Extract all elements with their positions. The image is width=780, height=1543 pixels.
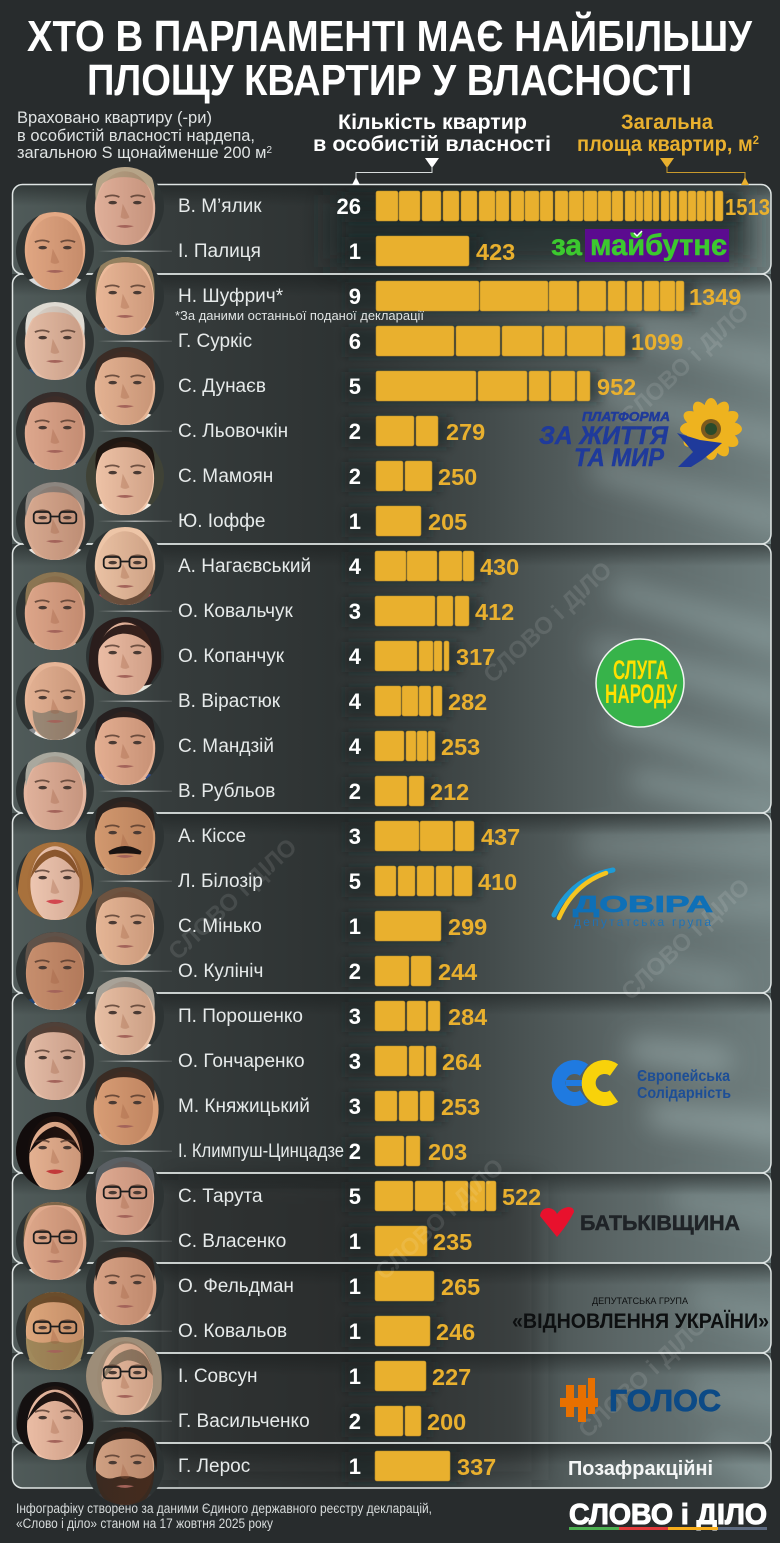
portrait: О. Фельдман (86, 1247, 164, 1325)
bar: 2 apartments (375, 956, 431, 986)
row: Г. Васильченко: Г. Васильченко (178, 1411, 310, 1432)
panel: Відновлення України (12, 1263, 771, 1353)
portrait: Г. Васильченко (16, 1378, 94, 1465)
row: Г. Васильченко: 2 (349, 1409, 361, 1434)
row: Н. Шуфрич: Н. Шуфрич* (178, 286, 284, 307)
row: Г. Лерос: 1 (349, 1454, 361, 1479)
row: О. Ковальчук: 412 (475, 599, 514, 625)
icon: sunflower (680, 398, 742, 460)
row: В. М'ялик: В. М’ялик (178, 196, 262, 217)
watermarks: СЛОВО і ДІЛО (616, 873, 755, 1006)
watermarks: СЛОВО і ДІЛО (478, 556, 617, 689)
portrait: В. Вірастюк (16, 662, 94, 740)
row: Ю. Іоффе (178, 506, 467, 536)
row: І. Климпуш-Цинцадзе: 203 (428, 1139, 467, 1165)
portrait: В. М'ялик (86, 167, 164, 245)
row: О. Кулініч: О. Кулініч (178, 961, 263, 982)
row: І. Климпуш-Цинцадзе (178, 1136, 467, 1166)
logo: Платформа за життя та мир: ЗА ЖИТТЯ (539, 422, 669, 450)
bar: 4 apartments (375, 731, 435, 761)
row: С. Тарута: С. Тарута (178, 1186, 263, 1207)
portrait: О. Копанчук (86, 613, 164, 700)
methodology note (17, 109, 272, 162)
bar: 3 apartments (375, 1046, 436, 1076)
column header: total area: площа квартир, м (577, 132, 766, 156)
bar: 1 apartment (375, 1271, 434, 1301)
row: М. Княжицький (178, 1091, 480, 1121)
icon: origami bird (677, 433, 722, 467)
row: О. Гончаренко: 3 (349, 1049, 361, 1074)
logo: Голос (560, 1378, 721, 1422)
row: І. Совсун: І. Совсун (178, 1366, 258, 1387)
portrait: С. Льовочкін (16, 392, 94, 470)
row: Г. Лерос: 337 (457, 1454, 496, 1480)
row: І. Совсун (178, 1361, 471, 1391)
logo: Слуга народу (596, 639, 684, 727)
row: О. Ковальчук (178, 596, 514, 626)
column header: total area (577, 110, 759, 185)
bar: 26 apartments (376, 191, 723, 221)
column header: apartment count: в особистій власності (313, 132, 551, 156)
logo: Платформа за життя та мир: ТА МИР (574, 444, 664, 472)
portrait: А. Кіссе (86, 797, 164, 875)
row: Г. Васильченко (178, 1406, 466, 1436)
footer source note: «Слово і діло» станом на 17 жовтня 2025 року (16, 1516, 273, 1531)
bar: 5 apartments (376, 371, 590, 401)
portrait: Ю. Іоффе (16, 482, 94, 560)
row: І. Палиця: І. Палиця (178, 241, 261, 262)
logo: Батьківщина (540, 1207, 740, 1237)
logo: Відновлення України: «ВІДНОВЛЕННЯ УКРАЇНИ» (512, 1310, 769, 1333)
row: П. Порошенко: П. Порошенко (178, 1006, 303, 1027)
row: В. Рубльов: 2 (349, 779, 361, 804)
logo: Європейська Солідарність (559, 1067, 731, 1102)
row: С. Мінько: С. Мінько (178, 916, 262, 937)
row: О. Ковальов: 246 (436, 1319, 475, 1345)
row: М. Княжицький: 3 (349, 1094, 361, 1119)
title: ПЛОЩУ КВАРТИР У ВЛАСНОСТІ (87, 56, 692, 105)
logo: Платформа за життя та мир (539, 398, 742, 472)
row: В. Рубльов (178, 776, 469, 806)
portrait: О. Гончаренко (16, 1018, 94, 1105)
column header: total area: Загальна (621, 110, 714, 134)
row: В. Рубльов: 212 (430, 779, 469, 805)
row: С. Льовочкін: 279 (446, 419, 485, 445)
row: С. Власенко (178, 1226, 472, 1256)
logo: Відновлення України: ДЕПУТАТСЬКА ГРУПА (592, 1296, 689, 1307)
row: С. Мінько (178, 911, 487, 941)
portrait: С. Мамоян (86, 437, 164, 515)
column header: apartment count: Кількість квартир (338, 110, 527, 134)
row: С. Мінько: 1 (349, 914, 361, 939)
row: О. Копанчук (178, 641, 495, 671)
row: О. Ковальчук: 3 (349, 599, 361, 624)
row: О. Ковальчук: О. Ковальчук (178, 601, 294, 622)
portrait: С. Тарута (86, 1157, 164, 1235)
row: А. Кіссе (178, 821, 520, 851)
row: О. Копанчук: О. Копанчук (178, 646, 285, 667)
logo: Слуга народу: СЛУГА (613, 655, 668, 685)
panel: Слуга народу (12, 544, 771, 813)
bar: 1 apartment (376, 236, 469, 266)
row: Ю. Іоффе: 1 (349, 509, 361, 534)
row: С. Мамоян: 250 (438, 464, 477, 490)
row: С. Тарута: 522 (502, 1184, 541, 1210)
row: Г. Васильченко: 200 (427, 1409, 466, 1435)
logo: Європейська Солідарність: Солідарність (637, 1085, 731, 1102)
row: В. Рубльов: В. Рубльов (178, 781, 275, 802)
row: В. М'ялик (178, 191, 770, 221)
row: А. Нагаєвський: 430 (480, 554, 519, 580)
methodology note: загальною S щонайменше 200 м (17, 144, 268, 162)
panel: Європейська Солідарність (12, 993, 771, 1173)
row: Ю. Іоффе: 205 (428, 509, 467, 535)
portrait: Н. Шуфрич (86, 257, 164, 335)
footnote: *За даними останньої поданої декларації (175, 308, 424, 323)
portrait: Г. Лерос (86, 1427, 164, 1505)
bar: 4 apartments (375, 686, 442, 716)
row: А. Кіссе: 3 (349, 824, 361, 849)
portrait: І. Совсун (86, 1337, 164, 1415)
bar: 1 apartment (375, 1451, 450, 1481)
methodology note: в особистій власності нардепа, (17, 127, 255, 145)
portrait: Г. Суркіс (16, 302, 94, 380)
row: О. Фельдман (178, 1271, 480, 1301)
row: П. Порошенко: 284 (448, 1004, 487, 1030)
row: Г. Суркіс: 1099 (631, 329, 683, 355)
row: А. Кіссе: А. Кіссе (178, 826, 246, 847)
bar: 2 apartments (376, 461, 432, 491)
methodology note: 2 (266, 145, 272, 156)
row: В. Вірастюк (178, 686, 487, 716)
row: Г. Суркіс: Г. Суркіс (178, 331, 252, 352)
watermarks (163, 298, 755, 1444)
portrait: О. Ковальов (16, 1292, 94, 1370)
row: Л. Білозір: Л. Білозір (178, 871, 263, 892)
bar: 3 apartments (375, 821, 474, 851)
row shadows (345, 192, 740, 1482)
row: О. Ковальов: 1 (349, 1319, 361, 1344)
bar: 6 apartments (376, 326, 625, 356)
row: В. М'ялик: 26 (337, 194, 361, 219)
row: С. Тарута: 5 (349, 1184, 361, 1209)
portraits (14, 163, 165, 1510)
row: Г. Суркіс (178, 326, 683, 356)
row: О. Кулініч (178, 956, 477, 986)
portrait: В. Рубльов (16, 752, 94, 830)
title (27, 10, 753, 105)
logo: Довіра: ДОВІРА (573, 891, 713, 917)
panel: Батьківщина (12, 1173, 771, 1263)
row: С. Тарута (178, 1181, 541, 1211)
bar: 9 apartments (376, 281, 684, 311)
bar: 2 apartments (376, 416, 438, 446)
logo: Відновлення України (512, 1296, 769, 1333)
row: І. Климпуш-Цинцадзе: І. Климпуш-Цинцадзе (178, 1141, 344, 1162)
panel: Голос (12, 1353, 771, 1443)
panel: Позафракційні (12, 1443, 771, 1488)
bar: 3 apartments (375, 1091, 434, 1121)
portrait: С. Мінько (86, 887, 164, 965)
row: А. Нагаєвський: А. Нагаєвський (178, 556, 311, 577)
row: І. Климпуш-Цинцадзе: 2 (349, 1139, 361, 1164)
row: Ю. Іоффе: Ю. Іоффе (178, 511, 265, 532)
bar: 2 apartments (375, 1136, 420, 1166)
bar: 2 apartments (375, 1406, 421, 1436)
row: Н. Шуфрич: 9 (349, 284, 361, 309)
bar: 1 apartment (376, 506, 421, 536)
row: Л. Білозір: 410 (478, 869, 517, 895)
methodology note: Враховано квартиру (-ри) (17, 109, 212, 127)
row: О. Фельдман: О. Фельдман (178, 1276, 294, 1297)
portrait: Л. Білозір (16, 838, 94, 925)
portrait: О. Ковальчук (16, 572, 94, 650)
row: Г. Суркіс: 6 (349, 329, 361, 354)
row: Г. Лерос: Г. Лерос (178, 1456, 250, 1477)
row: І. Палиця: 1 (349, 239, 361, 264)
column header: total area: 2 (753, 133, 759, 147)
row: О. Гончаренко (178, 1046, 481, 1076)
row: С. Мандзій (178, 731, 480, 761)
row: С. Власенко: С. Власенко (178, 1231, 286, 1252)
row: С. Дунаєв: 952 (597, 374, 636, 400)
portrait: М. Княжицький (86, 1067, 164, 1145)
row: С. Льовочкін (178, 416, 485, 446)
portrait: С. Мандзій (86, 707, 164, 785)
row: В. Вірастюк: 4 (349, 689, 362, 714)
row: О. Кулініч: 2 (349, 959, 361, 984)
panel: Довіра (12, 813, 771, 993)
logo: Слуга народу: НАРОДУ (605, 679, 678, 709)
row: Н. Шуфрич: 1349 (689, 284, 741, 310)
portrait: О. Кулініч (16, 932, 94, 1010)
row: С. Дунаєв: 5 (349, 374, 361, 399)
row: О. Фельдман: 265 (441, 1274, 480, 1300)
row: С. Льовочкін: С. Льовочкін (178, 421, 288, 442)
row: Г. Лерос (178, 1451, 496, 1481)
row: А. Кіссе: 437 (481, 824, 520, 850)
row: С. Мамоян (178, 461, 477, 491)
bar: 1 apartment (375, 911, 441, 941)
portrait: С. Власенко (16, 1202, 94, 1280)
row: Л. Білозір: 5 (349, 869, 361, 894)
bar: 2 apartments (375, 776, 424, 806)
row: С. Дунаєв (178, 371, 636, 401)
row: І. Совсун: 1 (349, 1364, 361, 1389)
row: Л. Білозір (178, 866, 517, 896)
bar: 4 apartments (375, 641, 449, 671)
row: А. Нагаєвський (178, 551, 519, 581)
row: С. Мінько: 299 (448, 914, 487, 940)
bar: 5 apartments (375, 1181, 496, 1211)
row: С. Мамоян: С. Мамоян (178, 466, 273, 487)
row: Н. Шуфрич (175, 281, 741, 323)
bar: 4 apartments (375, 551, 474, 581)
footer source note (16, 1501, 432, 1531)
watermarks: СЛОВО і ДІЛО (573, 1311, 712, 1444)
row: О. Кулініч: 244 (438, 959, 477, 985)
row: С. Мандзій: 4 (349, 734, 362, 759)
label: Позафракційні: Позафракційні (568, 1458, 713, 1480)
row: В. Вірастюк: В. Вірастюк (178, 691, 281, 712)
watermarks: СЛОВО і ДІЛО (615, 298, 754, 431)
row: С. Мамоян: 2 (349, 464, 361, 489)
portrait: С. Дунаєв (86, 347, 164, 425)
row: С. Мандзій: 253 (441, 734, 480, 760)
logo: Слово і діло: СЛОВО і ДІЛО (569, 1499, 767, 1531)
bar: 3 apartments (375, 596, 469, 626)
row: О. Ковальов: О. Ковальов (178, 1321, 287, 1342)
bar: 5 apartments (375, 866, 472, 896)
panel: Платформа за життя та мир (12, 274, 771, 544)
bar: 3 apartments (375, 1001, 440, 1031)
portrait: А. Нагаєвський (86, 527, 164, 605)
column header: apartment count (313, 110, 551, 185)
row: М. Княжицький: 253 (441, 1094, 480, 1120)
row: О. Ковальов (178, 1316, 475, 1346)
row: С. Власенко: 1 (349, 1229, 361, 1254)
bar: 1 apartment (375, 1361, 426, 1391)
logo: Європейська Солідарність: Європейська (637, 1068, 730, 1085)
row: С. Льовочкін: 2 (349, 419, 361, 444)
row: О. Копанчук: 317 (456, 644, 495, 670)
bar: 1 apartment (375, 1316, 430, 1346)
logo: Довіра (554, 870, 713, 929)
row: І. Палиця: 423 (476, 239, 515, 265)
row: С. Мандзій: С. Мандзій (178, 736, 274, 757)
row: В. М'ялик: 1513 (725, 194, 770, 220)
logo: За майбутнє: майбутнє (590, 229, 727, 262)
portrait: П. Порошенко (86, 977, 164, 1055)
portrait: І. Палиця (16, 212, 94, 290)
logo: Голос: ГОЛОС (609, 1383, 721, 1418)
portrait: І. Климпуш-Цинцадзе (16, 1112, 94, 1190)
row: П. Порошенко (178, 1001, 487, 1031)
row: М. Княжицький: М. Княжицький (178, 1096, 310, 1117)
watermarks: СЛОВО і ДІЛО (163, 833, 302, 966)
row: І. Палиця (178, 236, 515, 266)
row: О. Копанчук: 4 (349, 644, 362, 669)
row: С. Дунаєв: С. Дунаєв (178, 376, 266, 397)
logo: Платформа за життя та мир: ПЛАТФОРМА (582, 409, 670, 424)
bar: 1 apartment (375, 1226, 427, 1256)
row: О. Гончаренко: 264 (442, 1049, 481, 1075)
row: О. Гончаренко: О. Гончаренко (178, 1051, 305, 1072)
leader lines (98, 250, 172, 1422)
row: А. Нагаєвський: 4 (349, 554, 362, 579)
logo: Довіра: депутатська група (574, 915, 711, 929)
panel: За майбутнє (12, 184, 771, 274)
logo: Батьківщина: БАТЬКІВЩИНА (580, 1212, 740, 1235)
row: П. Порошенко: 3 (349, 1004, 361, 1029)
footer source note: Інфографіку створено за даними Єдиного державного реєстру декларацій, (16, 1501, 432, 1516)
row: В. Вірастюк: 282 (448, 689, 487, 715)
watermarks: СЛОВО і ДІЛО (370, 1153, 509, 1286)
row: О. Фельдман: 1 (349, 1274, 361, 1299)
row: С. Власенко: 235 (433, 1229, 472, 1255)
row: І. Совсун: 227 (432, 1364, 471, 1390)
logo: За майбутнє: за (551, 229, 582, 262)
